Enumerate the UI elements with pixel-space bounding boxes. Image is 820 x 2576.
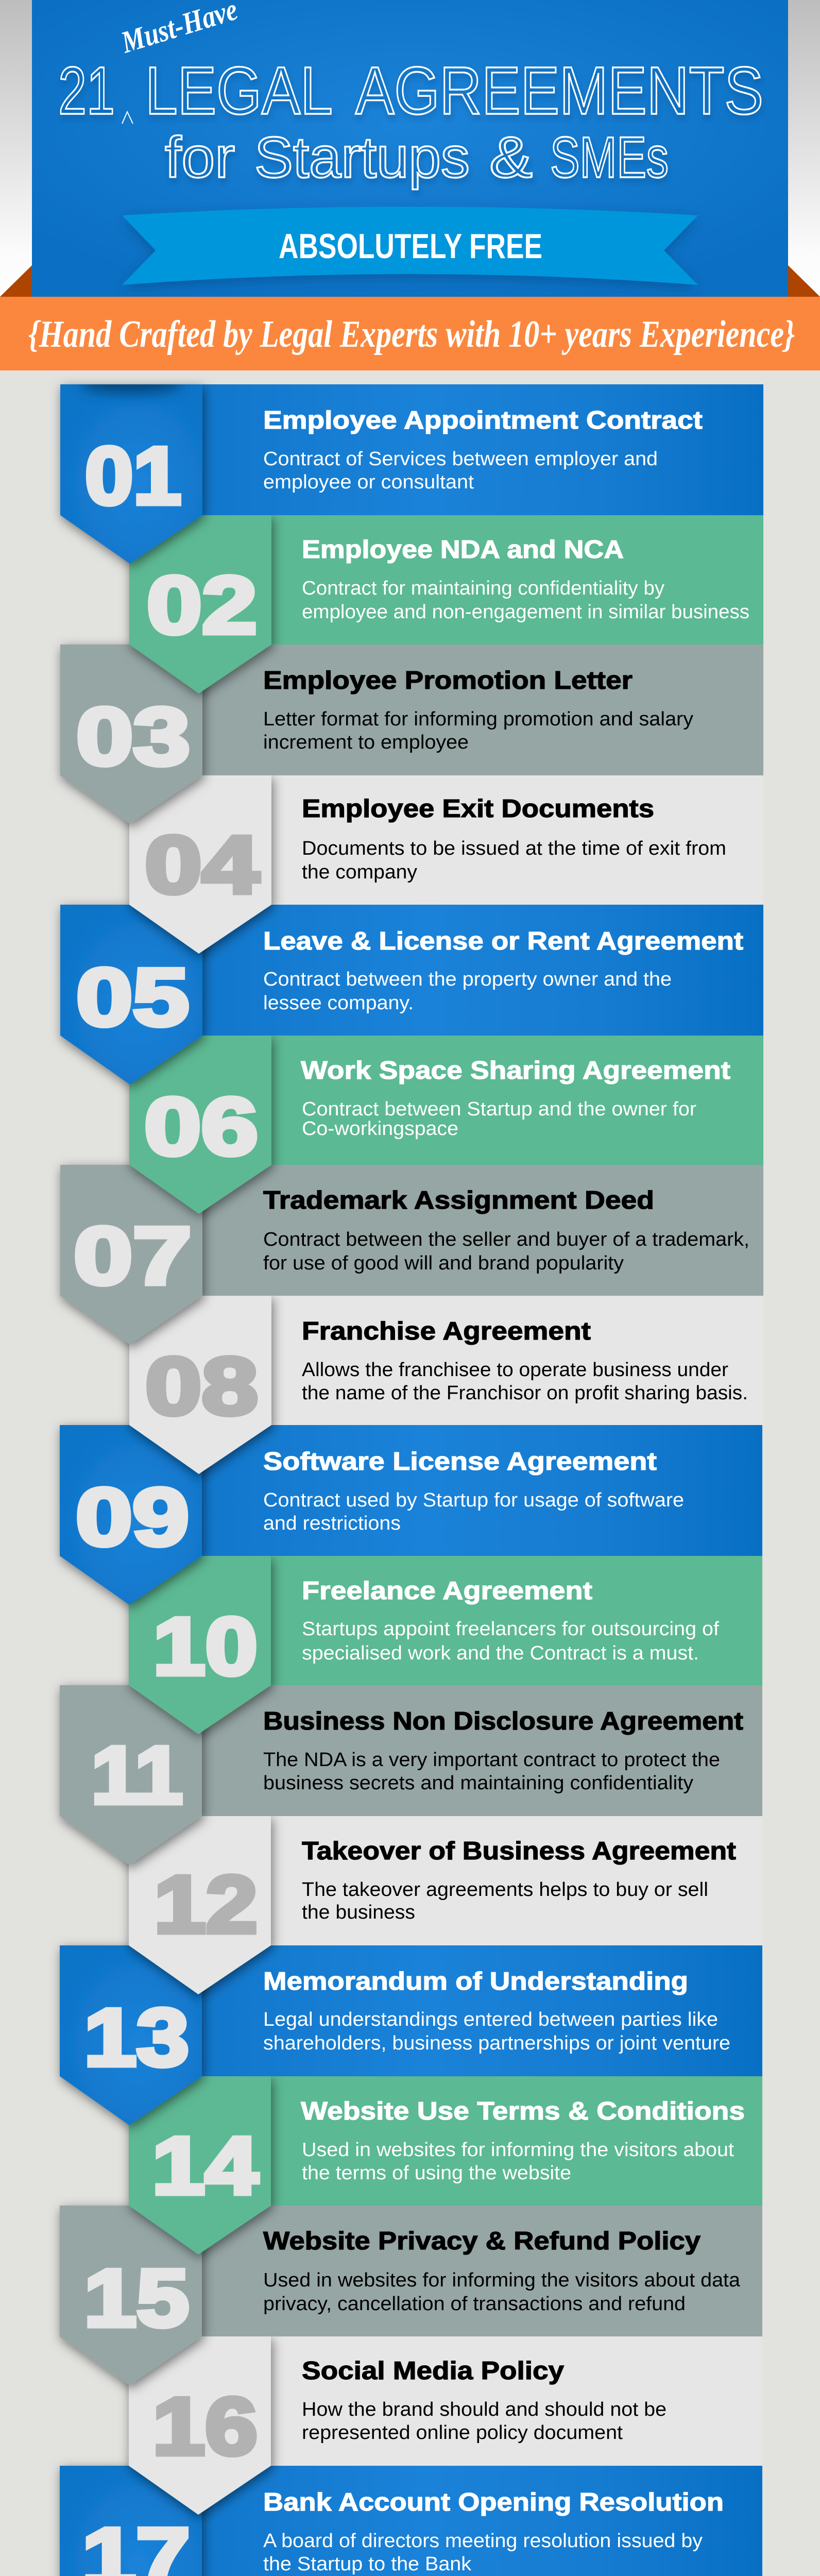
orange tagline band bbox=[0, 297, 820, 370]
row 16: Social Media Policy: represented online policy document bbox=[302, 2422, 623, 2444]
row 8: Franchise Agreement: the name of the Franchisor on profit sharing basis. bbox=[302, 1382, 748, 1404]
row 5: Leave & License or Rent Agreement: Contract between the property owner and the bbox=[263, 969, 672, 990]
row 9: Software License Agreement: Contract used by Startup for usage of software bbox=[263, 1489, 684, 1511]
row 10: Freelance Agreement bbox=[129, 1556, 762, 1734]
header side strips bbox=[0, 0, 820, 297]
row 13: Memorandum of Understanding: shareholders, business partnerships or joint venture bbox=[263, 2032, 730, 2054]
header bbox=[0, 0, 820, 297]
row 4: Employee Exit Documents: Documents to be issued at the time of exit from bbox=[302, 838, 726, 859]
row 13: Memorandum of Understanding: Memorandum of Understanding bbox=[263, 1968, 688, 1995]
title line 2: SMEs bbox=[550, 125, 669, 190]
ribbon: absolutely free: ABSOLUTELY FREE bbox=[279, 227, 542, 266]
row 14: Website Use Terms & Conditions: 14 bbox=[152, 2121, 258, 2211]
row 3: Employee Promotion Letter: Employee Promotion Letter bbox=[263, 667, 633, 694]
row 2: Employee NDA and NCA: Contract for maintaining confidentiality by bbox=[302, 578, 664, 599]
row 11: Business Non Disclosure Agreement: 11 bbox=[91, 1730, 183, 1821]
row 5: Leave & License or Rent Agreement: Leave & License or Rent Agreement bbox=[263, 927, 743, 955]
row 12: Takeover of Business Agreement bbox=[129, 1816, 762, 1994]
row 15: Website Privacy & Refund Policy bbox=[60, 2206, 762, 2385]
row 1: Employee Appointment Contract: employee or consultant bbox=[263, 471, 474, 493]
row 16: Social Media Policy: 16 bbox=[152, 2381, 258, 2472]
row 15: Website Privacy & Refund Policy: Website Privacy & Refund Policy bbox=[263, 2227, 701, 2255]
row 4: Employee Exit Documents: 04 bbox=[145, 820, 259, 910]
row 6: Work Space Sharing Agreement: Work Space Sharing Agreement bbox=[301, 1057, 730, 1084]
row 8: Franchise Agreement: Allows the franchisee to operate business under bbox=[302, 1359, 728, 1381]
row 10: Freelance Agreement: Freelance Agreement bbox=[302, 1577, 592, 1605]
row 9: Software License Agreement: Software License Agreement bbox=[263, 1448, 657, 1476]
row 13: Memorandum of Understanding bbox=[60, 1945, 762, 2125]
title line 1: LEGAL bbox=[145, 53, 333, 128]
row 10: Freelance Agreement: Startups appoint freelancers for outsourcing of bbox=[302, 1618, 719, 1640]
row 4: Employee Exit Documents bbox=[129, 775, 763, 954]
row 8: Franchise Agreement: Franchise Agreement bbox=[302, 1317, 591, 1345]
title line 2 bbox=[165, 125, 669, 190]
row 11: Business Non Disclosure Agreement: business secrets and maintaining confidentiality bbox=[263, 1772, 693, 1794]
row 16: Social Media Policy bbox=[129, 2336, 762, 2515]
title line 1 bbox=[58, 53, 763, 128]
row 3: Employee Promotion Letter: 03 bbox=[76, 691, 190, 782]
row 17: Bank Account Opening Resolution: A board of directors meeting resolution issued by bbox=[263, 2530, 703, 2552]
row 14: Website Use Terms & Conditions bbox=[129, 2076, 762, 2255]
row 5: Leave & License or Rent Agreement: 05 bbox=[76, 952, 189, 1043]
title line 2: Startups bbox=[254, 125, 470, 190]
row 8: Franchise Agreement bbox=[129, 1296, 763, 1474]
row 17: Bank Account Opening Resolution: the Startup to the Bank bbox=[263, 2553, 472, 2575]
row 11: Business Non Disclosure Agreement bbox=[60, 1685, 762, 1865]
row 4: Employee Exit Documents: Employee Exit Documents bbox=[302, 795, 654, 823]
ribbon: absolutely free bbox=[122, 207, 698, 285]
row 9: Software License Agreement: and restrictions bbox=[263, 1513, 401, 1534]
row 9: Software License Agreement: 09 bbox=[76, 1472, 189, 1563]
row 6: Work Space Sharing Agreement: Contract between Startup and the owner for bbox=[302, 1098, 696, 1120]
row 7: Trademark Assignment Deed: Contract between the seller and buyer of a trademark, bbox=[263, 1229, 749, 1250]
row 10: Freelance Agreement: specialised work and the Contract is a must. bbox=[302, 1642, 699, 1664]
row 10: Freelance Agreement: 10 bbox=[153, 1601, 258, 1692]
row 6: Work Space Sharing Agreement: 06 bbox=[144, 1081, 258, 1172]
title line 1: AGREEMENTS bbox=[355, 53, 763, 128]
row 3: Employee Promotion Letter: Letter format for informing promotion and salary bbox=[263, 708, 693, 730]
title line 2: for bbox=[165, 125, 235, 190]
row 2: Employee NDA and NCA: employee and non-engagement in similar business bbox=[302, 601, 749, 623]
row 13: Memorandum of Understanding: 13 bbox=[84, 1992, 189, 2083]
agreement list bbox=[60, 373, 763, 2576]
row 17: Bank Account Opening Resolution: Bank Account Opening Resolution bbox=[263, 2488, 724, 2516]
row 2: Employee NDA and NCA: 02 bbox=[147, 560, 257, 651]
row 1: Employee Appointment Contract: Contract of Services between employer and bbox=[263, 448, 658, 470]
insertion caret bbox=[122, 112, 133, 124]
row 3: Employee Promotion Letter bbox=[60, 645, 763, 824]
row 17: Bank Account Opening Resolution bbox=[60, 2466, 762, 2576]
row 1: Employee Appointment Contract: 01 bbox=[85, 431, 181, 521]
row 3: Employee Promotion Letter: increment to employee bbox=[263, 732, 469, 753]
row 16: Social Media Policy: How the brand should and should not be bbox=[302, 2399, 667, 2420]
row 14: Website Use Terms & Conditions: Website Use Terms & Conditions bbox=[301, 2097, 745, 2125]
row 2: Employee NDA and NCA: Employee NDA and NCA bbox=[302, 536, 624, 564]
fold flap right bbox=[788, 265, 820, 297]
row 14: Website Use Terms & Conditions: the terms of using the website bbox=[302, 2162, 571, 2184]
row 12: Takeover of Business Agreement: Takeover of Business Agreement bbox=[302, 1837, 736, 1865]
row 11: Business Non Disclosure Agreement: The NDA is a very important contract to protect the bbox=[263, 1749, 720, 1771]
row 6: Work Space Sharing Agreement bbox=[129, 1036, 763, 1214]
row 1: Employee Appointment Contract: Employee Appointment Contract bbox=[263, 406, 703, 434]
row 7: Trademark Assignment Deed: Trademark Assignment Deed bbox=[263, 1187, 654, 1214]
title line 2: & bbox=[489, 125, 533, 190]
row 8: Franchise Agreement: 08 bbox=[145, 1341, 258, 1432]
row 5: Leave & License or Rent Agreement bbox=[60, 905, 763, 1084]
row 7: Trademark Assignment Deed: 07 bbox=[74, 1211, 192, 1301]
row 16: Social Media Policy: Social Media Policy bbox=[302, 2357, 564, 2385]
row 7: Trademark Assignment Deed bbox=[60, 1165, 763, 1345]
row 4: Employee Exit Documents: the company bbox=[302, 861, 417, 883]
row 15: Website Privacy & Refund Policy: Used in websites for informing the visitors about data bbox=[263, 2269, 741, 2291]
row 11: Business Non Disclosure Agreement: Business Non Disclosure Agreement bbox=[263, 1707, 743, 1735]
row 12: Takeover of Business Agreement: 12 bbox=[154, 1859, 258, 1950]
row 7: Trademark Assignment Deed: for use of good will and brand popularity bbox=[263, 1252, 624, 1274]
title line 1: 21 bbox=[58, 53, 115, 128]
row 15: Website Privacy & Refund Policy: privacy, cancellation of transactions and refund bbox=[263, 2293, 686, 2315]
header blue panel bbox=[32, 0, 788, 297]
row 14: Website Use Terms & Conditions: Used in websites for informing the visitors about bbox=[302, 2139, 734, 2161]
row 5: Leave & License or Rent Agreement: lessee company. bbox=[263, 992, 414, 1014]
row 15: Website Privacy & Refund Policy: 15 bbox=[84, 2253, 189, 2344]
row 12: Takeover of Business Agreement: The takeover agreements helps to buy or sell bbox=[302, 1879, 708, 1901]
row 6: Work Space Sharing Agreement: Co-workingspace bbox=[302, 1118, 458, 1140]
row 2: Employee NDA and NCA bbox=[129, 515, 763, 693]
row 13: Memorandum of Understanding: Legal understandings entered between parties like bbox=[263, 2009, 718, 2030]
row 9: Software License Agreement bbox=[60, 1425, 762, 1605]
row 1: Employee Appointment Contract bbox=[60, 373, 763, 564]
fold flap left bbox=[0, 265, 32, 297]
row 12: Takeover of Business Agreement: the business bbox=[302, 1902, 415, 1923]
